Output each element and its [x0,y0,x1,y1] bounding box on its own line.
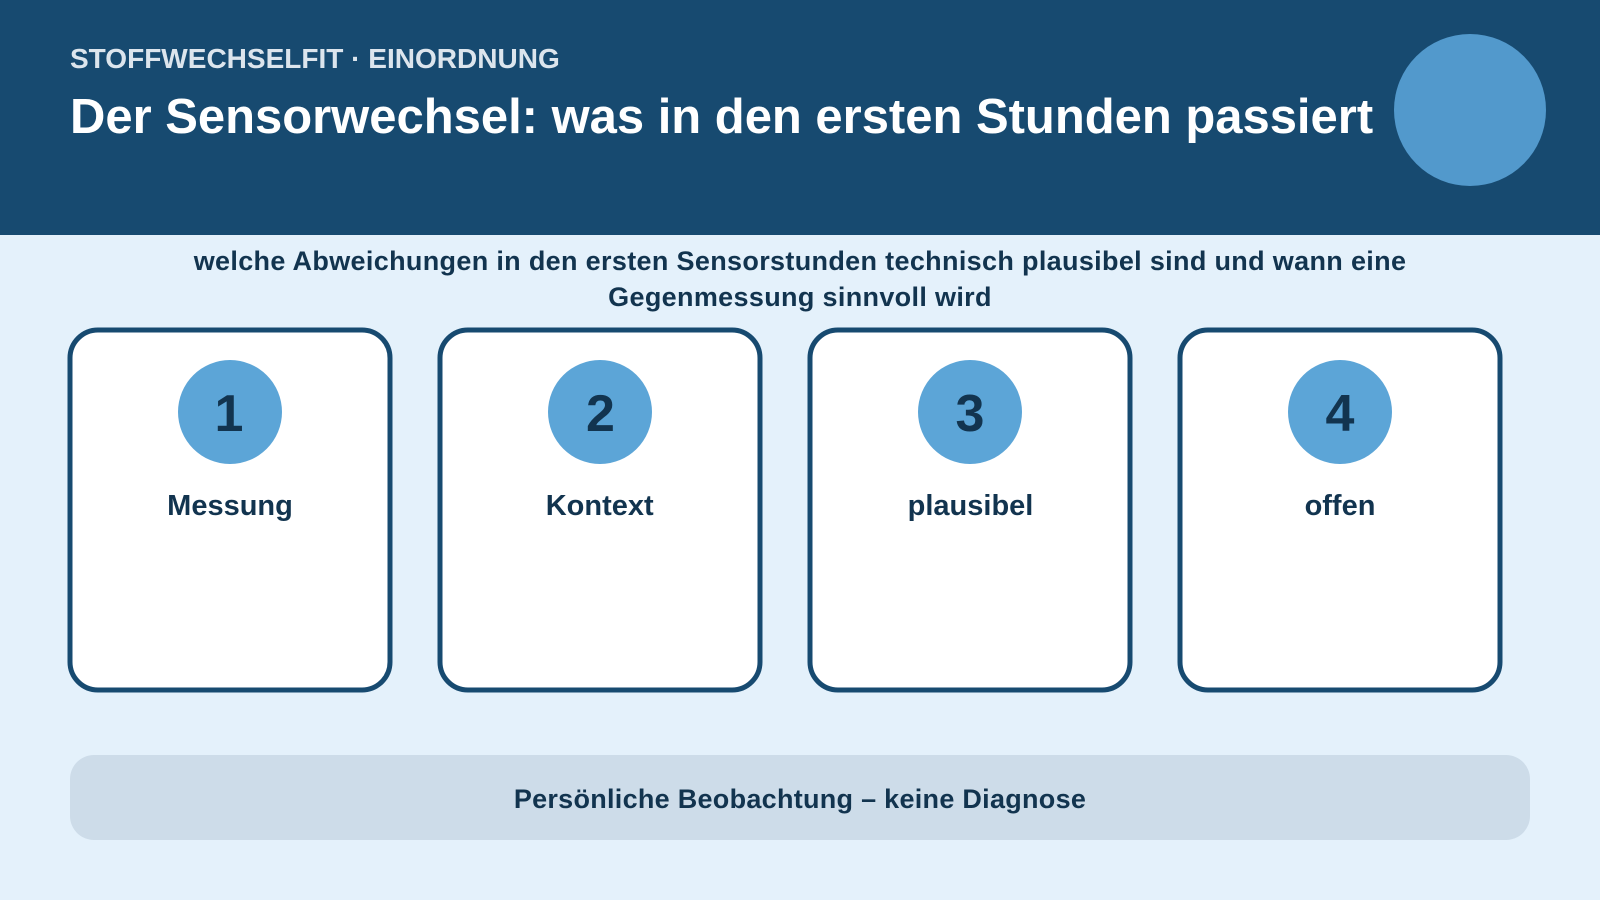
header band [0,0,1600,235]
decorative header circle [1394,34,1546,186]
number badge 1: 1 [215,385,243,443]
card label: plausibel: plausibel [908,490,1033,522]
title: Der Sensorwechsel: was in den ersten Stunden passiert [70,90,1373,144]
footer note: Persönliche Beobachtung – keine Diagnose [514,784,1086,814]
number badge 3 [918,360,1022,464]
number badge 4 [1288,360,1392,464]
eyebrow: STOFFWECHSELFIT · EINORDNUNG [70,43,560,74]
number badge 2: 2 [586,385,615,443]
number badge 1 [178,360,282,464]
number badge 4: 4 [1326,385,1355,443]
number badge 3: 3 [956,385,984,443]
card 1: Messung [70,330,390,690]
number badge 2 [548,360,652,464]
card label: Kontext: Kontext [546,490,654,522]
subtitle: welche Abweichungen in den ersten Sensorstunden technisch plausibel sind und wann eine [193,246,1406,276]
card 2: Kontext [440,330,760,690]
card 4: offen [1180,330,1500,690]
footer note [70,755,1530,840]
card label: Messung: Messung [167,490,293,522]
card 3: plausibel [810,330,1130,690]
subtitle: Gegenmessung sinnvoll wird [608,282,992,312]
card label: offen: offen [1305,490,1375,522]
subtitle [193,246,1406,312]
